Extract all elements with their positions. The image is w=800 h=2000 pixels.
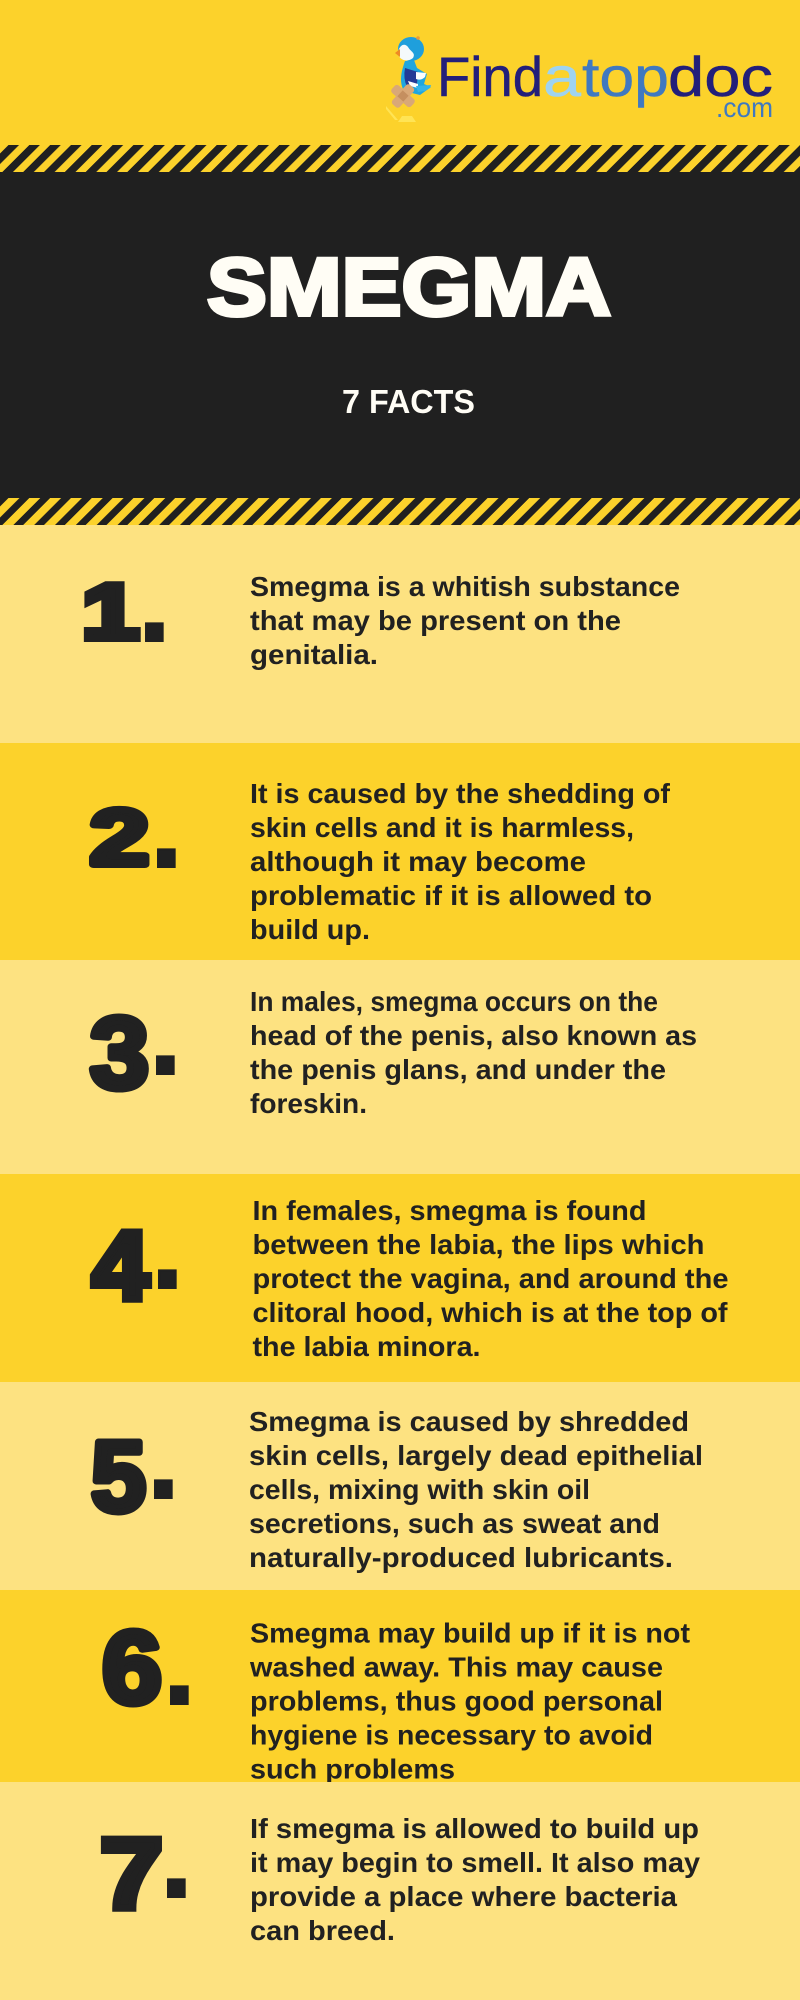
number 2: 2 [90,792,149,882]
bottom hazard stripe band [0,498,800,525]
fact 7 text: If smegma is allowed to build up [250,1813,699,1844]
logo wordmark [437,45,773,123]
fact 3 text: the penis glans, and under the [250,1054,666,1085]
logo wordmark: doc [668,45,773,108]
fact 6 text: Smegma may build up if it is not [250,1618,690,1648]
fact 7 text: provide a place where bacteria [250,1881,678,1912]
number 6: . [163,1598,196,1730]
panel: fact 4 [0,1174,800,1382]
panel: fact 2 [0,743,800,960]
fact 5 text [249,1406,703,1573]
fact 1 text: that may be present on the [250,605,621,636]
fact 1 text: genitalia. [250,639,378,670]
logo wordmark: top [582,45,669,108]
panel: fact 6 [0,1590,800,1784]
panel: logo header [0,0,800,146]
number 5 [91,1392,180,1533]
number 5: 5 [91,1421,146,1533]
fact 5 text: Smegma is caused by shredded [249,1406,689,1437]
fact 3 text: In males, smegma occurs on the [250,986,658,1017]
fact 2 text: It is caused by the shedding of [250,778,671,809]
panel: title block [0,172,800,498]
fact 2 text: although it may become [250,846,586,877]
fact 6 text: washed away. This may cause [249,1652,663,1682]
fact 1 text: Smegma is a whitish substance [250,571,680,602]
fact 4 text: In females, smegma is found [252,1195,646,1226]
logo wordmark: Find [437,45,543,108]
number 2 [90,761,183,893]
panel: fact 5 [0,1382,800,1590]
number 3 [90,968,182,1110]
fact 5 text: naturally-produced lubricants. [249,1542,673,1573]
number 5: . [147,1392,180,1524]
number 1 [82,535,171,667]
fact 5 text: cells, mixing with skin oil [249,1474,590,1505]
subtitle: 7 FACTS [342,383,475,420]
fact 7 text: can breed. [250,1915,395,1946]
fact 5 text: skin cells, largely dead epithelial [249,1440,703,1471]
fact 6 text: such problems [250,1754,455,1784]
number 3: 3 [90,998,149,1110]
fact 3 text: foreskin. [250,1088,367,1119]
fact 6 text [249,1618,690,1784]
fact 1 text [250,571,680,670]
panel: fact 1 [0,525,800,743]
fact 3 text: head of the penis, also known as [250,1020,697,1051]
fact 2 text [250,778,671,945]
fact 2 text: build up. [250,914,370,945]
fact 4 text [252,1195,728,1362]
fact 2 text: skin cells and it is harmless, [250,812,634,843]
fact 6 text: hygiene is necessary to avoid [250,1720,653,1750]
number 4: 4 [92,1211,149,1320]
number 7: 7 [100,1818,163,1930]
fact 4 text: protect the vagina, and around the [252,1263,728,1294]
number 2: . [150,761,183,893]
fact 4 text: clitoral hood, which is at the top of [252,1297,728,1328]
panel: fact 7 [0,1782,800,2000]
logo wordmark: .com [716,92,773,123]
fact 2 text: problematic if it is allowed to [250,880,652,911]
number 3: . [149,968,182,1100]
number 1: 1 [82,568,139,656]
fact 7 text: it may begin to smell. It also may [250,1847,701,1878]
title: SMEGMA [207,242,611,333]
number 6 [102,1598,196,1730]
logo wordmark: a [543,45,582,108]
number 7: . [160,1791,193,1923]
fact 4 text: the labia minora. [252,1331,480,1362]
icon: duck mascot with bandage [385,36,431,122]
fact 3 text [250,986,697,1119]
number 6: 6 [102,1610,162,1725]
number 4: . [151,1182,184,1314]
number 1: . [138,535,171,667]
fact 7 text [250,1813,701,1946]
number 7 [100,1791,193,1930]
fact 4 text: between the labia, the lips which [252,1229,704,1260]
fact 6 text: problems, thus good personal [250,1686,663,1716]
fact 5 text: secretions, such as sweat and [249,1508,660,1539]
panel: fact 3 [0,960,800,1174]
number 4 [92,1182,184,1320]
top hazard stripe band [0,145,800,173]
